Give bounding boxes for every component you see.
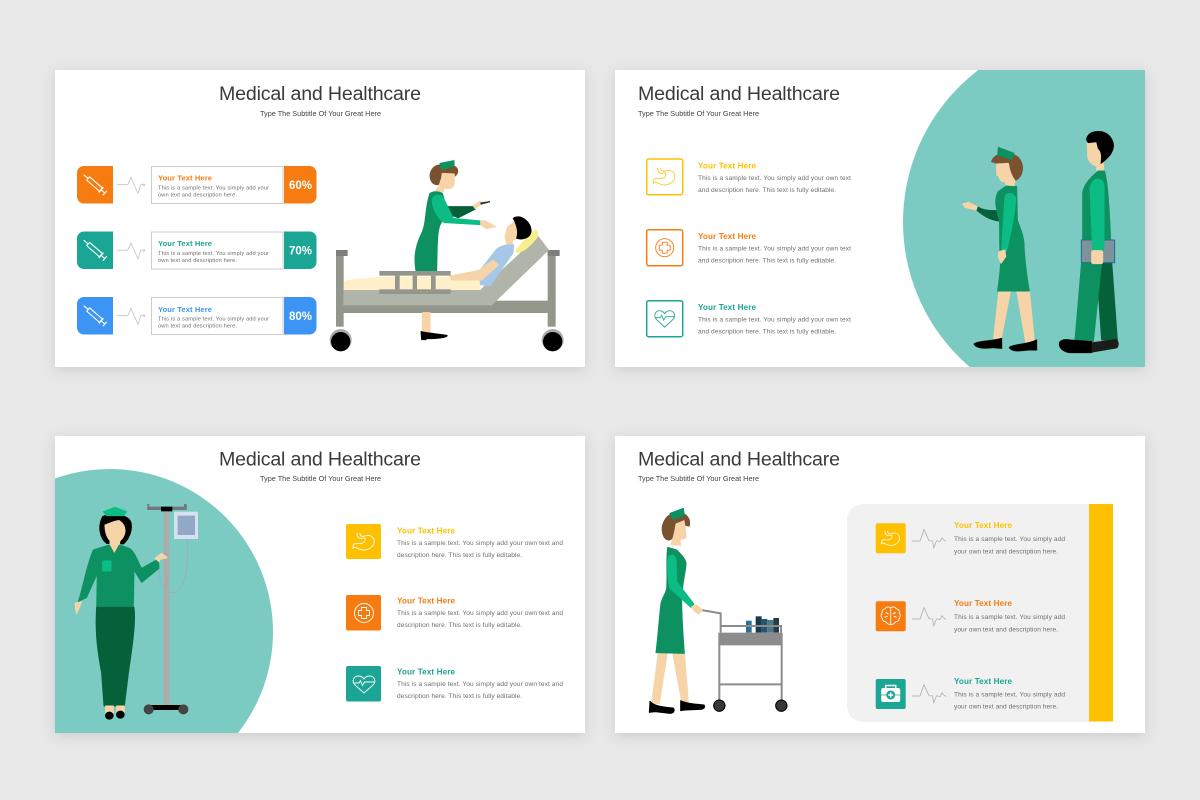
item: stomach: This is a sample text. You simply add <box>954 536 1065 543</box>
icon: pulse arrow <box>117 177 145 193</box>
item: medical cross: Your Text Here <box>397 596 455 606</box>
IV stand <box>144 504 198 714</box>
item: heart: Your Text Here <box>397 668 455 676</box>
icon: cross on orange <box>346 595 381 630</box>
bed rail <box>379 271 451 294</box>
blanket <box>344 277 481 290</box>
icon: orange syringe <box>77 166 113 204</box>
item: stomach: Your Text Here <box>698 162 756 170</box>
item: stomach: description here. This text is fully editable. <box>397 552 522 559</box>
text box: own text and description here. <box>158 192 237 198</box>
heading: slide 3 title: Medical and Healthcare <box>219 448 421 470</box>
item: first aid kit: your own text and description here. <box>954 704 1058 710</box>
percent badge 60%: 60% <box>289 180 312 192</box>
item: heart: and description here. This text is fully editable. <box>698 328 836 336</box>
walking nurse <box>963 147 1037 351</box>
text box: Your Text Here <box>158 239 212 248</box>
percent badge 70%: 70% <box>289 246 312 258</box>
icon: brain on orange <box>876 601 906 631</box>
icon: pulse line <box>912 684 946 703</box>
walking doctor <box>1059 131 1119 353</box>
patient <box>450 217 538 287</box>
panel: slide 3 nurse with IV stand <box>52 436 588 740</box>
icon: cross in circle outline <box>647 230 683 266</box>
panel: slide 2 nurse and doctor <box>612 70 1148 374</box>
item: medical cross: This is a sample text. You simply add your own text <box>698 246 851 252</box>
icon: blue syringe <box>77 297 113 334</box>
icon: pulse arrow <box>117 243 145 259</box>
illustration: nurse and doctor walking <box>963 131 1119 353</box>
illustration: nurse and patient in hospital bed <box>330 161 564 351</box>
item: first aid kit: Your Text Here <box>954 677 1012 686</box>
standing nurse <box>75 507 167 720</box>
heading: slide 1 title: Medical and Healthcare <box>219 83 421 105</box>
item: brain: This is a sample text. You simply add <box>954 614 1065 621</box>
text box: Your Text Here <box>158 174 212 182</box>
subtitle: slide 3: Type The Subtitle Of Your Great Here <box>260 474 381 483</box>
nurse <box>415 161 496 340</box>
item: brain <box>876 599 1065 634</box>
illustration: nurse beside IV stand <box>75 504 198 720</box>
item: medical cross: Your Text Here <box>698 232 756 241</box>
icon: stomach outline <box>647 159 683 195</box>
text box: This is a sample text. You simply add your <box>158 316 269 322</box>
text box <box>152 232 283 269</box>
icon: teal syringe <box>77 232 113 269</box>
subtitle: slide 1: Type The Subtitle Of Your Great Here <box>260 109 381 118</box>
bed frame <box>330 236 564 351</box>
text box: This is a sample text. You simply add your <box>158 251 269 257</box>
text box <box>152 298 283 334</box>
panel: slide 1 bed and percentages <box>55 70 585 367</box>
item: stomach: Your Text Here <box>954 521 1012 530</box>
item: stomach: This is a sample text. You simply add your own text and <box>397 540 563 547</box>
text box: This is a sample text. You simply add your <box>158 186 269 192</box>
heading: slide 4 title: Medical and Healthcare <box>638 448 840 470</box>
text box <box>152 166 283 204</box>
cart <box>701 610 787 711</box>
item: medical cross: and description here. This text is fully editable. <box>698 258 836 264</box>
item: medical cross: description here. This text is fully editable. <box>397 622 522 629</box>
item: stomach <box>346 524 563 559</box>
item: stomach: Your Text Here <box>397 526 455 536</box>
panel: slide 4 nurse with cart <box>615 436 1145 733</box>
heading: slide 2 title: Medical and Healthcare <box>638 83 840 105</box>
item: heart: This is a sample text. You simply add your own text and <box>397 681 563 688</box>
icon: heart on teal <box>346 666 381 702</box>
item: stomach: This is a sample text. You simply add your own text <box>698 175 851 182</box>
text box: own text and description here. <box>158 258 237 264</box>
row: 60 percent <box>77 166 316 204</box>
item: stomach: your own text and description here. <box>954 548 1058 556</box>
item: stomach <box>876 521 1065 556</box>
teal circle background <box>55 469 273 733</box>
icon: pulse line <box>912 530 946 548</box>
item: medical cross: This is a sample text. You simply add your own text and <box>397 610 563 617</box>
item: brain: your own text and description here. <box>954 626 1058 634</box>
item: heart: Your Text Here <box>698 303 756 312</box>
item: heart <box>346 666 563 702</box>
item: medical cross <box>346 595 563 630</box>
item: stomach: and description here. This text is fully editable. <box>698 187 836 194</box>
row: 70 percent <box>77 232 316 269</box>
percent badge 70% <box>284 232 316 269</box>
text box: Your Text Here <box>158 305 212 314</box>
nurse <box>649 508 705 713</box>
icon: stomach on yellow <box>346 524 381 559</box>
teal circle background <box>903 70 1145 367</box>
icon: heart pulse outline <box>647 301 683 337</box>
item: heart <box>647 301 851 337</box>
percent badge 60% <box>284 166 316 204</box>
icon: stomach on yellow <box>876 523 906 553</box>
icon: first aid kit on teal <box>876 679 906 709</box>
text box: own text and description here. <box>158 324 237 330</box>
percent badge 80%: 80% <box>289 311 312 323</box>
row: 80 percent <box>77 297 316 334</box>
item: medical cross <box>647 230 851 266</box>
item: heart: This is a sample text. You simply add your own text <box>698 316 851 324</box>
subtitle: slide 2: Type The Subtitle Of Your Great Here <box>638 109 759 118</box>
icon: pulse arrow <box>117 308 145 324</box>
grey content card with yellow band <box>847 504 1113 722</box>
icon: pulse line <box>912 608 946 626</box>
item: first aid kit <box>876 677 1065 710</box>
illustration: nurse pushing medicine cart <box>649 508 787 713</box>
subtitle: slide 4: Type The Subtitle Of Your Great Here <box>638 474 759 483</box>
item: stomach <box>647 159 851 195</box>
item: heart: description here. This text is fully editable. <box>397 693 522 700</box>
item: brain: Your Text Here <box>954 599 1012 608</box>
item: first aid kit: This is a sample text. You simply add <box>954 692 1065 698</box>
percent badge 80% <box>284 297 316 334</box>
